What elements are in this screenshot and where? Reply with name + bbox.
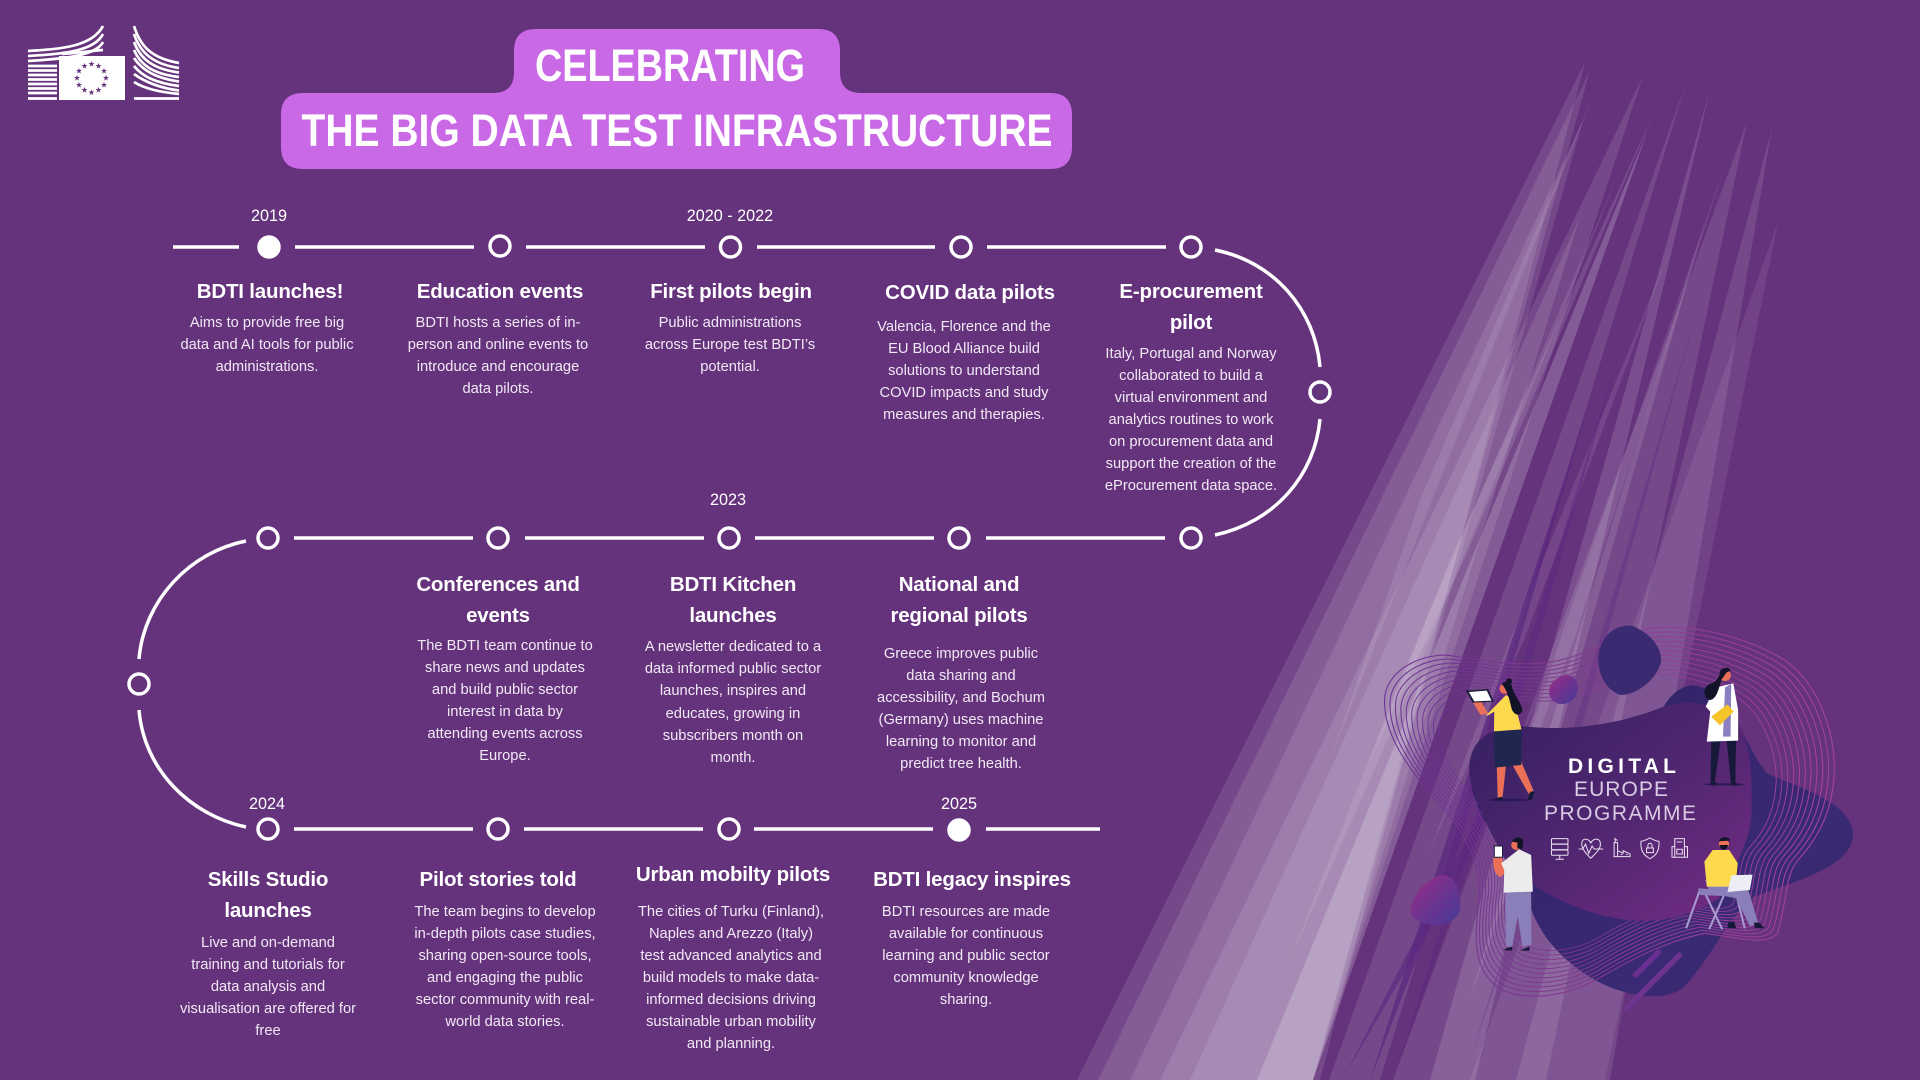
milestone: COVID data pilots: Valencia, Florence and the	[877, 319, 1051, 335]
milestone: Conferences and events: The BDTI team continue to	[417, 638, 593, 654]
milestone: COVID data pilots: EU Blood Alliance build	[888, 341, 1040, 357]
timeline nodes	[129, 236, 1330, 840]
programme wordmark: EUROPE	[1574, 778, 1668, 801]
milestone: First pilots begin: First pilots begin	[650, 280, 812, 303]
milestone: Conferences and events: and build public sector	[432, 682, 578, 698]
icon: server	[1551, 839, 1568, 859]
central blob	[1469, 703, 1752, 921]
milestone: Skills Studio launches: Skills Studio	[208, 868, 328, 891]
milestone: Urban mobilty pilots: The cities of Turku (Finland),	[638, 904, 824, 920]
milestone: National and regional pilots: accessibility, and Bochum	[877, 690, 1045, 706]
milestone: Conferences and events: events	[466, 604, 530, 627]
programme wordmark	[1544, 755, 1696, 825]
logo flag	[59, 56, 125, 100]
milestone: National and regional pilots: Greece improves public	[884, 646, 1038, 662]
milestone: Urban mobilty pilots: build models to make data-	[643, 970, 819, 986]
background light streaks	[1077, 62, 1778, 1080]
milestone: COVID data pilots: solutions to understand	[888, 363, 1040, 379]
milestone: BDTI Kitchen launches: A newsletter dedicated to a	[645, 639, 822, 655]
milestone: Pilot stories told: and engaging the public	[427, 970, 583, 986]
milestone: National and regional pilots: learning to monitor and	[886, 734, 1036, 750]
figure: man with laptop	[1686, 837, 1764, 929]
timeline track	[139, 247, 1320, 829]
year labels: 2019	[251, 207, 287, 225]
milestone: First pilots begin: potential.	[700, 359, 760, 375]
milestone: E-procurement pilot: analytics routines to work	[1109, 412, 1274, 428]
milestone: Conferences and events: Europe.	[479, 748, 531, 764]
milestone: BDTI launches	[180, 280, 354, 375]
milestone: Pilot stories told: world data stories.	[444, 1014, 565, 1030]
programme wordmark: DIGITAL	[1568, 755, 1676, 778]
milestone: Urban mobilty pilots: informed decisions driving	[646, 992, 816, 1008]
milestone: E-procurement pilot: virtual environment and	[1115, 390, 1267, 406]
milestone: Conferences and events: share news and updates	[425, 660, 585, 676]
milestone: COVID data pilots: COVID impacts and study	[880, 385, 1049, 401]
milestone: E-procurement pilot: pilot	[1170, 311, 1213, 334]
milestone: BDTI legacy inspires: sharing.	[940, 992, 992, 1008]
logo: European Commission	[28, 26, 179, 100]
accent strokes	[1635, 952, 1659, 975]
year labels: 2023	[710, 491, 746, 509]
milestone: Urban mobilty pilots: and planning.	[687, 1036, 775, 1052]
milestone: BDTI Kitchen launches: month.	[711, 750, 755, 766]
milestone: BDTI legacy inspires: BDTI resources are made	[882, 904, 1050, 920]
icon: building	[1672, 839, 1687, 857]
milestone: BDTI legacy inspires: community knowledge	[893, 970, 1039, 986]
milestone: Urban mobilty pilots: Naples and Arezzo (Italy)	[649, 926, 813, 942]
milestone: National and regional pilots: National and	[899, 573, 1019, 596]
milestone: Conferences and events: interest in data by	[447, 704, 564, 720]
small gradient blob	[1549, 675, 1578, 704]
milestone: Skills Studio launches	[180, 868, 356, 1039]
programme wordmark: PROGRAMME	[1544, 802, 1696, 825]
milestone: E-procurement pilot: on procurement data and	[1109, 434, 1273, 450]
milestone: BDTI Kitchen launches: BDTI Kitchen	[670, 573, 796, 596]
milestone: BDTI Kitchen launches: data informed public sector	[645, 661, 821, 677]
milestone: E-procurement pilot	[1105, 280, 1277, 494]
year labels: 2024	[249, 795, 285, 813]
milestone: BDTI launches: Aims to provide free big	[190, 315, 344, 331]
milestone: BDTI Kitchen launches	[645, 573, 822, 766]
milestone: Conferences and events	[416, 573, 593, 764]
milestone: Skills Studio launches: data analysis and	[211, 979, 325, 995]
milestone: BDTI Kitchen launches: educates, growing in	[666, 706, 800, 722]
milestone: Skills Studio launches: training and tutorials for	[191, 957, 345, 973]
milestone: National and regional pilots: regional pilots	[890, 604, 1028, 627]
milestone: Urban mobilty pilots	[636, 863, 830, 1052]
milestone: National and regional pilots: (Germany) uses machine	[879, 712, 1043, 728]
milestone: Pilot stories told: The team begins to develop	[414, 904, 596, 920]
title line 2: THE BIG DATA TEST INFRASTRUCTURE	[302, 105, 1052, 156]
milestone: BDTI legacy inspires: available for continuous	[889, 926, 1043, 942]
milestone: Skills Studio launches: Live and on-demand	[201, 935, 335, 951]
title line 1: CELEBRATING	[535, 40, 805, 91]
milestone: BDTI Kitchen launches: launches, inspires and	[660, 683, 806, 699]
contour lines	[1385, 627, 1834, 996]
milestone: E-procurement pilot: eProcurement data space.	[1105, 478, 1277, 494]
milestone: COVID data pilots	[877, 281, 1055, 423]
milestone: BDTI launches: data and AI tools for public	[180, 337, 354, 353]
milestone: BDTI legacy inspires: BDTI legacy inspires	[873, 868, 1071, 891]
milestone: National and regional pilots: data sharing and	[906, 668, 1016, 684]
milestone: Education events: Education events	[417, 280, 583, 303]
year labels: 2020 - 2022	[687, 207, 773, 225]
milestone: Skills Studio launches: launches	[224, 899, 312, 922]
milestone: Education events: data pilots.	[462, 381, 534, 397]
icons row	[1551, 838, 1687, 859]
milestone: Skills Studio launches: free	[255, 1023, 281, 1039]
milestone: BDTI legacy inspires	[873, 868, 1071, 1008]
milestone: Education events: BDTI hosts a series of in-	[416, 315, 581, 331]
milestone: E-procurement pilot: Italy, Portugal and Norway	[1105, 346, 1277, 362]
figure: man with phone	[1493, 837, 1533, 951]
milestone: National and regional pilots	[877, 573, 1045, 772]
milestone: Pilot stories told: Pilot stories told	[420, 868, 576, 891]
milestone: First pilots begin: Public administrations	[659, 315, 801, 331]
milestone: E-procurement pilot: support the creation of the	[1106, 456, 1276, 472]
icon: factory	[1613, 839, 1630, 857]
left gradient blob	[1411, 875, 1460, 925]
milestone: BDTI legacy inspires: learning and public sector	[882, 948, 1050, 964]
milestone: BDTI launches: administrations.	[216, 359, 318, 375]
milestone: COVID data pilots: measures and therapies.	[883, 407, 1045, 423]
milestone: E-procurement pilot: E-procurement	[1119, 280, 1263, 303]
milestone: Education events: person and online events to	[408, 337, 588, 353]
dark blob	[1470, 685, 1853, 996]
milestone: Conferences and events: attending events across	[427, 726, 583, 742]
milestone: Pilot stories told: sector community with real-	[416, 992, 594, 1008]
milestone: Urban mobilty pilots: test advanced analytics and	[640, 948, 822, 964]
milestone: Pilot stories told: in-depth pilots case studies,	[414, 926, 596, 942]
figure: woman with tablet	[1466, 678, 1535, 801]
milestone: Education events	[408, 280, 588, 397]
milestone: Urban mobilty pilots: Urban mobilty pilots	[636, 863, 830, 886]
figure: woman in white coat	[1703, 668, 1745, 785]
milestone: COVID data pilots: COVID data pilots	[885, 281, 1055, 304]
title banner	[281, 29, 1072, 169]
illustration: Digital Europe Programme	[1385, 626, 1853, 1008]
milestone: BDTI Kitchen launches: launches	[689, 604, 777, 627]
milestone: Education events: introduce and encourage	[417, 359, 579, 375]
year labels	[249, 207, 977, 813]
milestone: Urban mobilty pilots: sustainable urban mobility	[646, 1014, 817, 1030]
navy blob	[1598, 626, 1661, 695]
milestone: E-procurement pilot: collaborated to build a	[1119, 368, 1264, 384]
milestone: First pilots begin	[645, 280, 815, 375]
icon: shield lock	[1641, 838, 1659, 859]
milestone: Pilot stories told	[414, 868, 596, 1030]
icon: health heart	[1579, 839, 1603, 858]
year labels: 2025	[941, 795, 977, 813]
milestone: Conferences and events: Conferences and	[416, 573, 580, 596]
milestone: Pilot stories told: sharing open-source tools,	[418, 948, 592, 964]
milestone: BDTI Kitchen launches: subscribers month on	[663, 728, 803, 744]
background dark streaks	[1345, 300, 1700, 1080]
milestone: National and regional pilots: predict tree health.	[900, 756, 1022, 772]
milestone: First pilots begin: across Europe test BDTI’s	[645, 337, 815, 353]
milestone: BDTI launches: BDTI launches!	[197, 280, 343, 303]
milestone: Skills Studio launches: visualisation are offered for	[180, 1001, 356, 1017]
